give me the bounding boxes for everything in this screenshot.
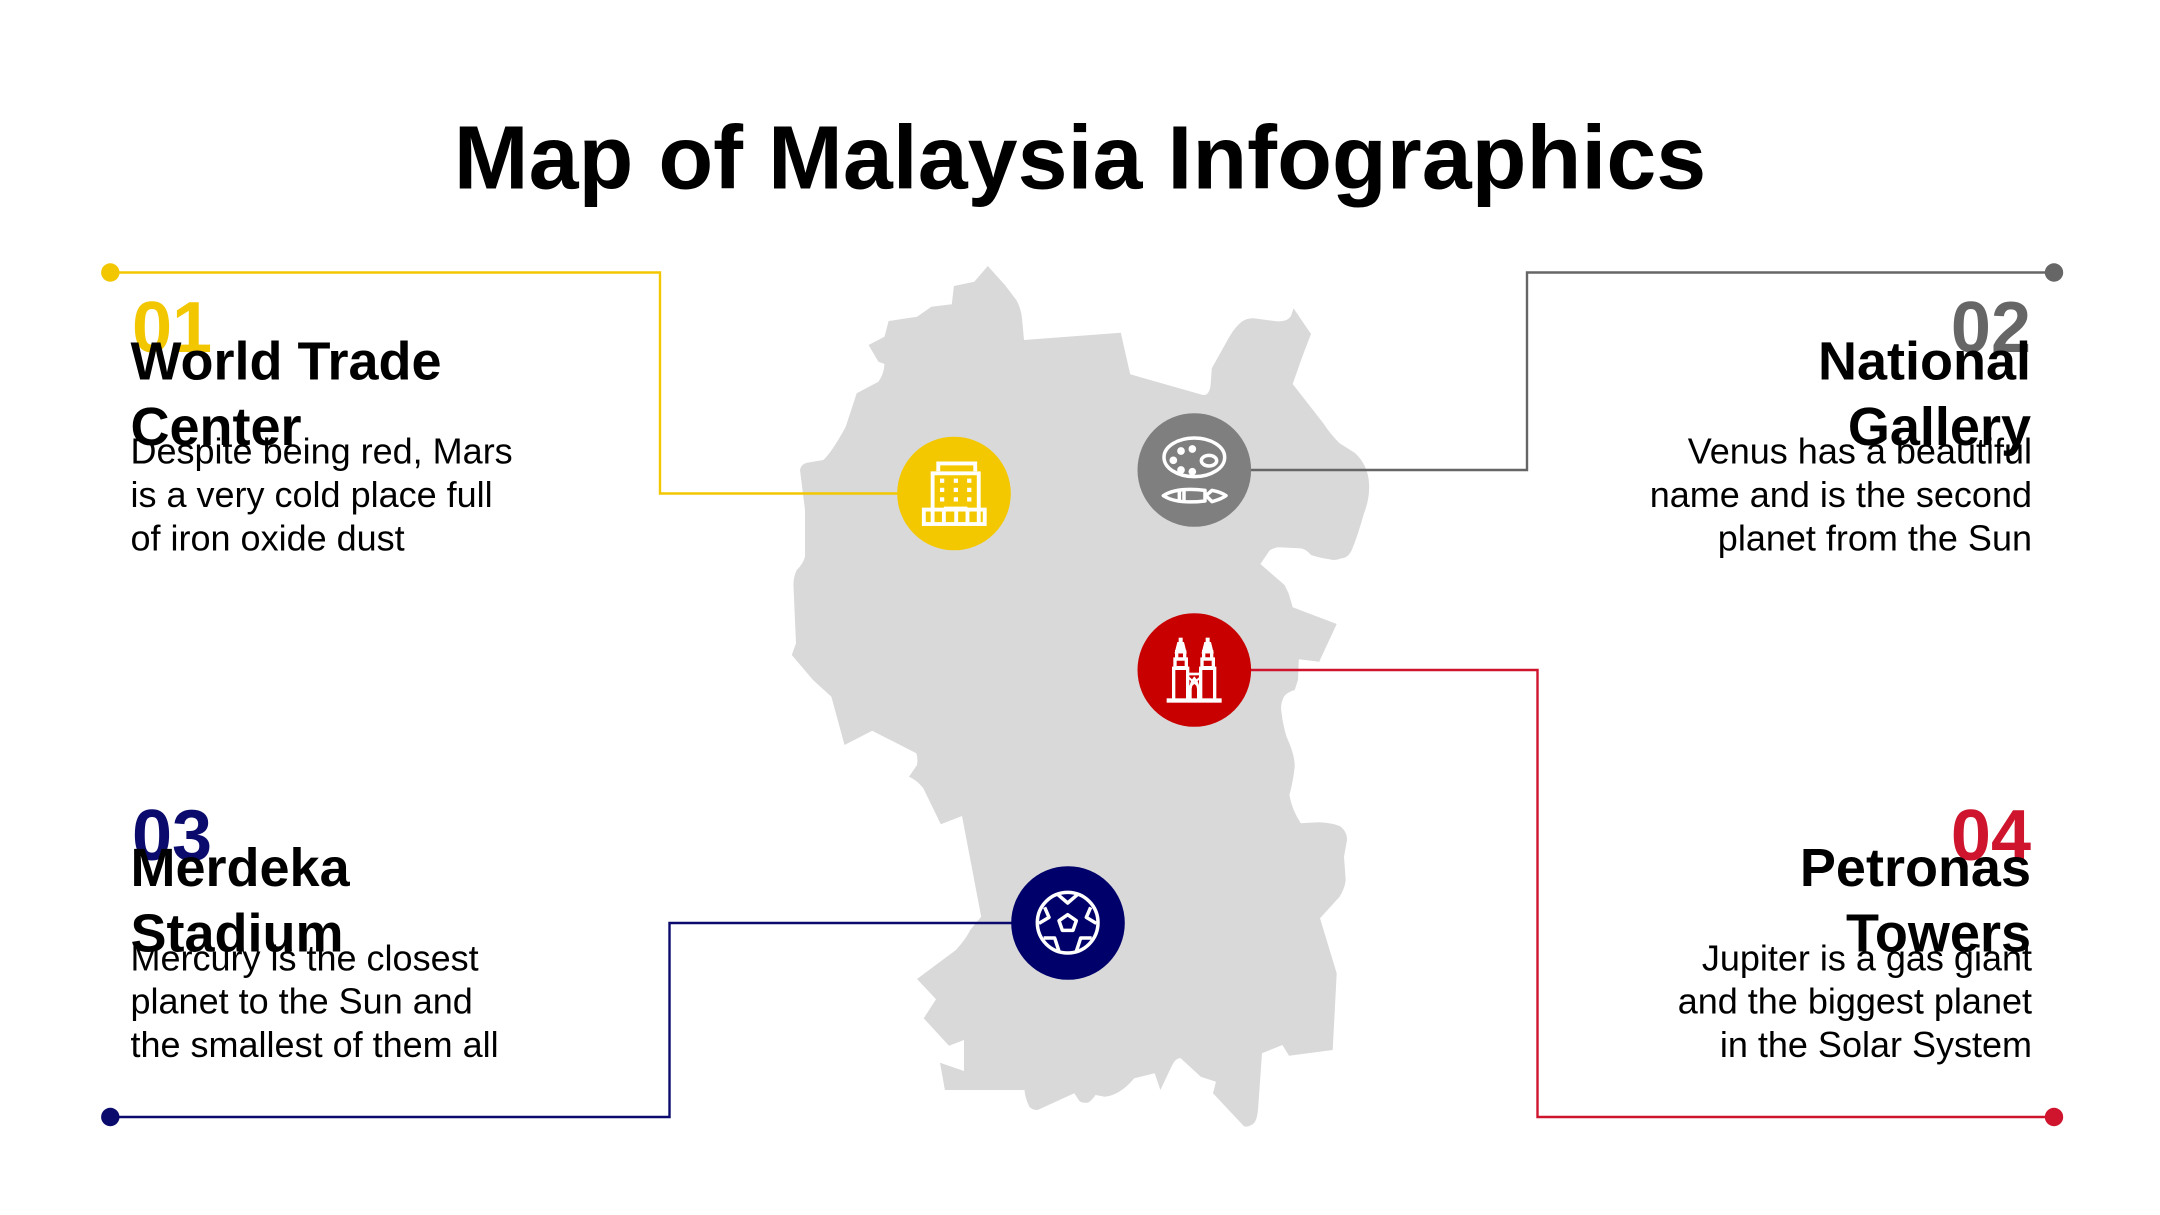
map of Malaysia bbox=[792, 266, 1369, 1127]
heading: Stadium bbox=[130, 904, 344, 964]
body text: and the biggest planet bbox=[1678, 981, 2032, 1022]
icon: building, yellow circle bbox=[897, 437, 1011, 550]
panel: 02 National Gallery bbox=[1650, 288, 2032, 558]
body text: Venus has a beautiful bbox=[1688, 431, 2032, 472]
panel: 03 Merdeka Stadium bbox=[130, 796, 499, 1065]
heading: Petronas bbox=[1800, 838, 2031, 898]
body text: planet to the Sun and bbox=[130, 981, 473, 1022]
panel: 04 Petronas Towers bbox=[1678, 796, 2032, 1065]
connector: 04 red bbox=[1194, 670, 2063, 1126]
body text: Jupiter is a gas giant bbox=[1702, 937, 2032, 978]
number 02: 02 bbox=[1951, 288, 2031, 368]
connector: 01 yellow bbox=[101, 263, 954, 494]
heading: Gallery bbox=[1848, 397, 2031, 457]
body text: of iron oxide dust bbox=[130, 517, 405, 558]
heading: Merdeka bbox=[130, 838, 350, 898]
body text: name and is the second bbox=[1650, 474, 2032, 515]
heading: Towers bbox=[1846, 904, 2031, 964]
icon: twin towers, red circle bbox=[1138, 613, 1251, 727]
body text: is a very cold place full bbox=[130, 474, 493, 515]
connector: 03 navy bbox=[101, 923, 1068, 1126]
connector: 02 grey bbox=[1194, 263, 2063, 470]
number 03: 03 bbox=[132, 796, 212, 876]
body text: in the Solar System bbox=[1720, 1024, 2032, 1065]
body text: Despite being red, Mars bbox=[130, 431, 513, 472]
body text: the smallest of them all bbox=[130, 1024, 499, 1065]
heading: Center bbox=[130, 397, 302, 457]
body text: Mercury is the closest bbox=[130, 937, 479, 978]
panel: 01 World Trade Center bbox=[130, 288, 513, 558]
heading: National bbox=[1818, 332, 2031, 392]
heading: World Trade bbox=[130, 332, 442, 392]
number 01: 01 bbox=[132, 288, 212, 368]
icon: football, navy circle bbox=[1011, 866, 1125, 980]
body text: planet from the Sun bbox=[1718, 517, 2032, 558]
icon: palette, grey circle bbox=[1138, 413, 1251, 527]
number 04: 04 bbox=[1951, 796, 2031, 876]
title: Map of Malaysia Infographics bbox=[454, 108, 1706, 208]
